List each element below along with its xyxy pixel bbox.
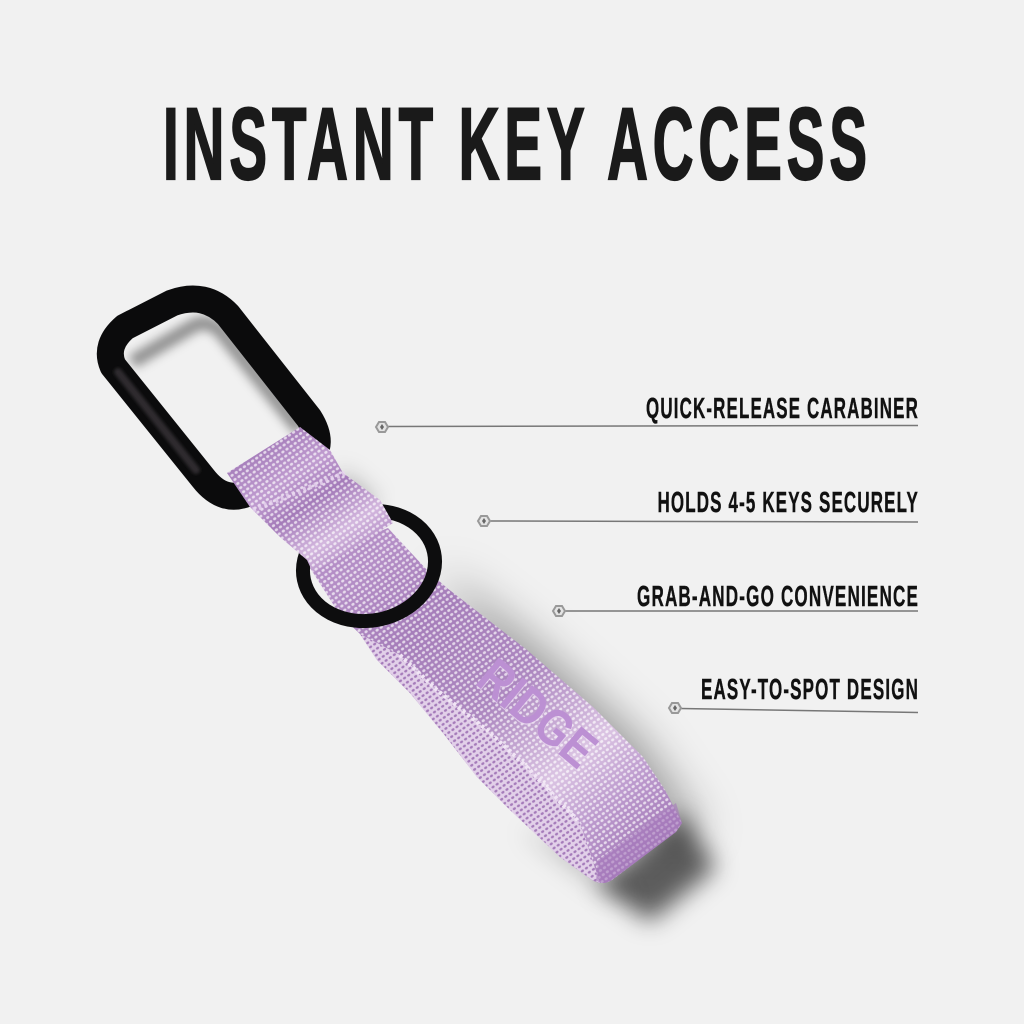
leader line bbox=[565, 610, 918, 612]
upper strap fold bbox=[227, 427, 393, 573]
gate highlight bbox=[118, 372, 196, 470]
leader line bbox=[388, 426, 918, 427]
marker bbox=[553, 606, 565, 616]
front face weave bbox=[305, 528, 682, 883]
split ring bbox=[293, 499, 445, 633]
embossed logo: RIDGE bbox=[466, 648, 608, 780]
marker centre bbox=[380, 424, 384, 430]
product: ridge key strap bbox=[110, 299, 716, 922]
stitching bbox=[253, 473, 345, 510]
marker centre bbox=[673, 705, 677, 711]
marker centre bbox=[482, 518, 486, 524]
lower strap bbox=[305, 528, 682, 883]
callout: holds keys bbox=[478, 487, 919, 526]
marker bbox=[669, 703, 681, 713]
callout: quick-release carabiner bbox=[376, 393, 919, 432]
marker bbox=[376, 422, 388, 432]
folded back layer bbox=[360, 634, 600, 883]
carabiner shadow bbox=[132, 323, 300, 430]
callout: easy-to-spot bbox=[669, 674, 919, 713]
strap shadow bbox=[335, 470, 716, 922]
marker bbox=[478, 516, 490, 526]
leader line bbox=[681, 708, 918, 712]
embossed logo: RIDGE bbox=[466, 649, 608, 781]
marker centre bbox=[557, 608, 561, 614]
back layer weave bbox=[360, 634, 600, 883]
carabiner bbox=[110, 299, 317, 496]
strap end curl bbox=[596, 803, 682, 883]
leader line bbox=[490, 521, 918, 522]
callout: grab-and-go bbox=[553, 581, 919, 616]
seam bbox=[400, 655, 580, 823]
